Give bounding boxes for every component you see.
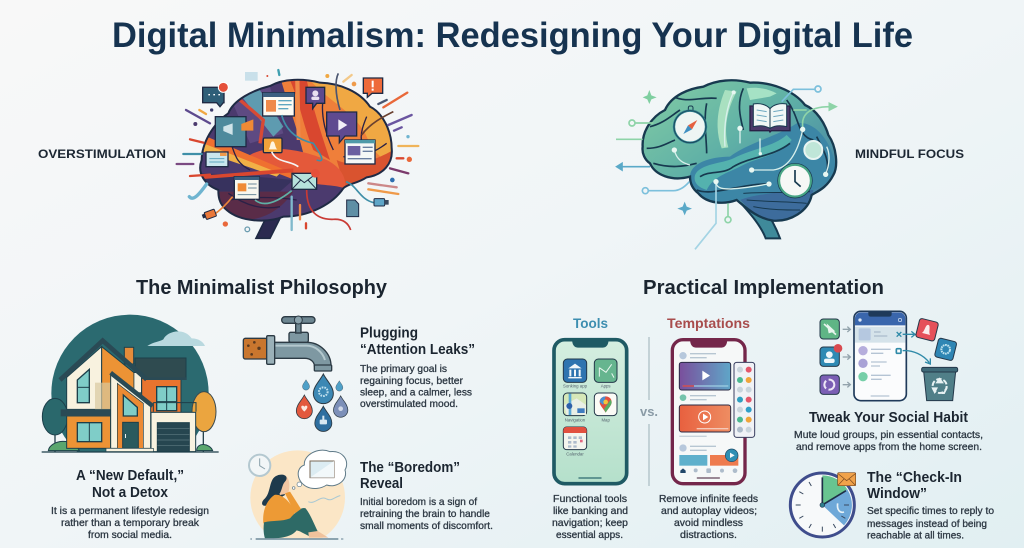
illustration: calm brain [616,77,843,249]
bell card [263,138,282,153]
drop symbols [301,387,343,424]
heading: tools: Tools [573,315,608,331]
label: mindful focus: MINDFUL FOCUS [855,147,964,161]
body [360,363,472,410]
image card [245,72,258,81]
document [347,200,359,217]
body: reachable at all times. [867,530,964,542]
body: retraining the brain to handle [360,508,490,520]
brain body [644,81,835,220]
notch [690,338,727,348]
text: boredom reveal [360,460,493,532]
heading: The “Check-In [867,470,962,486]
clock face [790,473,854,537]
text: tools description: like banking and [553,505,628,517]
apps icon: Apps [601,383,611,388]
label: overstimulation: OVERSTIMULATION [38,147,166,161]
thumbnails [679,455,738,466]
body: The primary goal is [360,363,447,375]
burst streaks [177,70,418,230]
small window left [206,152,228,167]
trees [42,392,216,452]
text: temptations description [659,493,758,541]
illustration: social habit phone [820,311,958,401]
drops [296,374,348,431]
illustration: overstimulated brain [177,70,418,238]
wavy line [308,496,340,502]
browser window: lower [234,177,259,199]
divider lines [679,434,707,438]
ground line [42,450,219,454]
side panel [734,362,755,437]
alert bubble [363,78,383,97]
envelope [838,473,856,486]
autoplay button [725,449,738,462]
body [794,429,983,453]
calendar icon [563,427,587,456]
browser window: article top [263,93,294,116]
heading [867,470,962,502]
text: new default [51,468,209,541]
bell app [915,318,939,341]
text: temptations description: and autoplay videos; [661,505,757,517]
body [51,505,209,541]
heading: Plugging [360,326,418,342]
text: temptations description: distractions. [680,529,737,541]
backdrop [250,450,345,545]
title: Digital Minimalism: Redesigning Your Digital Life [112,16,913,55]
notch [572,338,609,348]
settings app [934,338,957,361]
map icon: Map [601,417,610,422]
phone frame [554,340,627,484]
body: rather than a temporary break [61,517,200,529]
main house walls [61,347,141,448]
body: from social media. [88,529,172,541]
divider and vs: vs. [640,405,658,419]
green sector [822,475,847,505]
orb [804,141,822,159]
illustration: check-in clock [790,473,856,537]
front gable [111,373,153,448]
body: Set specific times to reply to [867,505,994,517]
plug: orange [202,209,217,220]
wall clock [249,455,270,476]
heading: A “New Default,” [76,468,184,484]
hub [820,503,825,507]
garage [151,412,196,452]
browser window: right [345,140,375,164]
body: Mute loud groups, pin essential contacts, [794,429,983,441]
heading: The “Boredom” [360,460,460,476]
megaphone window [215,117,253,147]
heading: practical implementation: Practical Implementation [643,277,884,299]
video card 1 [679,362,731,390]
brain stem [737,198,780,238]
clock hands [822,477,846,505]
clock [778,163,812,198]
phone: tools [554,338,627,484]
text: tools description: navigation; keep [552,517,628,529]
brain stem [256,215,282,238]
video window [327,112,357,143]
navigation icon: Navigation [565,417,586,422]
woman [262,475,328,539]
body [867,505,994,542]
text: temptations description: avoid mindless [674,517,743,529]
circuit lines and nodes [616,86,836,249]
grey arrows [843,327,850,387]
heading [360,460,460,492]
feed header 2 [680,394,716,401]
calendar icon: Calendar [566,451,584,456]
faucet body [267,316,332,371]
phone [854,311,906,401]
heading: the minimalist philosophy: The Minimalist Philosophy [136,277,388,299]
speech bubble and alert [203,82,228,107]
banking app [563,359,588,388]
text: tools description: Functional tools [553,493,627,505]
heading [360,326,475,358]
compass [674,106,706,143]
body: sleep, and a calmer, less [360,386,472,398]
text: tools description: essential apps. [556,529,623,541]
heading: Not a Detox [92,485,168,501]
illustration: leaking faucet [243,316,348,431]
feed header 1 [679,352,716,359]
phone: temptations [672,338,755,484]
illustration: house [42,314,219,453]
text: attention leaks [360,326,475,410]
phone frame [672,340,745,484]
main roof [60,341,147,380]
x mark and arrow to bell [897,331,915,337]
tick marks [796,478,849,532]
recycle bin [922,367,958,401]
plug: blue [374,199,389,206]
banking app: Sonking app [563,383,588,388]
heading: Tweak Your Social Habit [809,410,968,426]
dots [193,74,412,232]
text: tweak your social habit [794,410,983,453]
tab bar [680,468,737,473]
thought cloud [292,450,347,489]
video card 2 [679,405,731,432]
brain body [201,80,391,220]
body: messages instead of being [867,518,987,530]
backdrop circle [51,314,209,452]
phone glyph [837,503,844,512]
text: tools description [552,493,628,541]
cloud [147,331,205,346]
nodes [672,90,828,187]
envelope [292,169,320,189]
floor [256,536,338,541]
step and ground [106,448,153,452]
heading: temptations: Temptations [667,315,750,331]
heading [76,468,184,501]
body: small moments of discomfort. [360,520,493,532]
apps icon [594,359,617,388]
heading: Window” [867,486,927,502]
body: Initial boredom is a sign of [360,496,477,508]
feed header 3 [679,444,716,452]
app icons left [820,319,842,394]
cork [243,338,267,359]
open book [750,104,790,132]
chimney [124,347,134,364]
upper right wing [135,358,196,413]
home bar [697,477,720,479]
heading: Reveal [360,476,403,492]
home bar [578,477,602,479]
navigation icon [563,393,587,422]
pin and arrow to bin [896,349,930,364]
map icon [594,393,617,422]
body: and remove apps from the home screen. [796,441,982,453]
text: temptations description: Remove infinite feeds [659,493,758,505]
heading: “Attention Leaks” [360,342,475,358]
body: overstimulated mood. [360,398,458,410]
body [360,496,493,532]
text: check-in window [867,470,994,542]
cables [213,73,393,230]
blue sector [822,489,852,525]
sparkles [643,90,692,215]
profile bubble [306,87,325,109]
floor dots [250,537,343,541]
body: regaining focus, better [360,375,463,387]
body: It is a permanent lifestyle redesign [51,505,209,517]
illustration: bored woman [249,450,347,545]
